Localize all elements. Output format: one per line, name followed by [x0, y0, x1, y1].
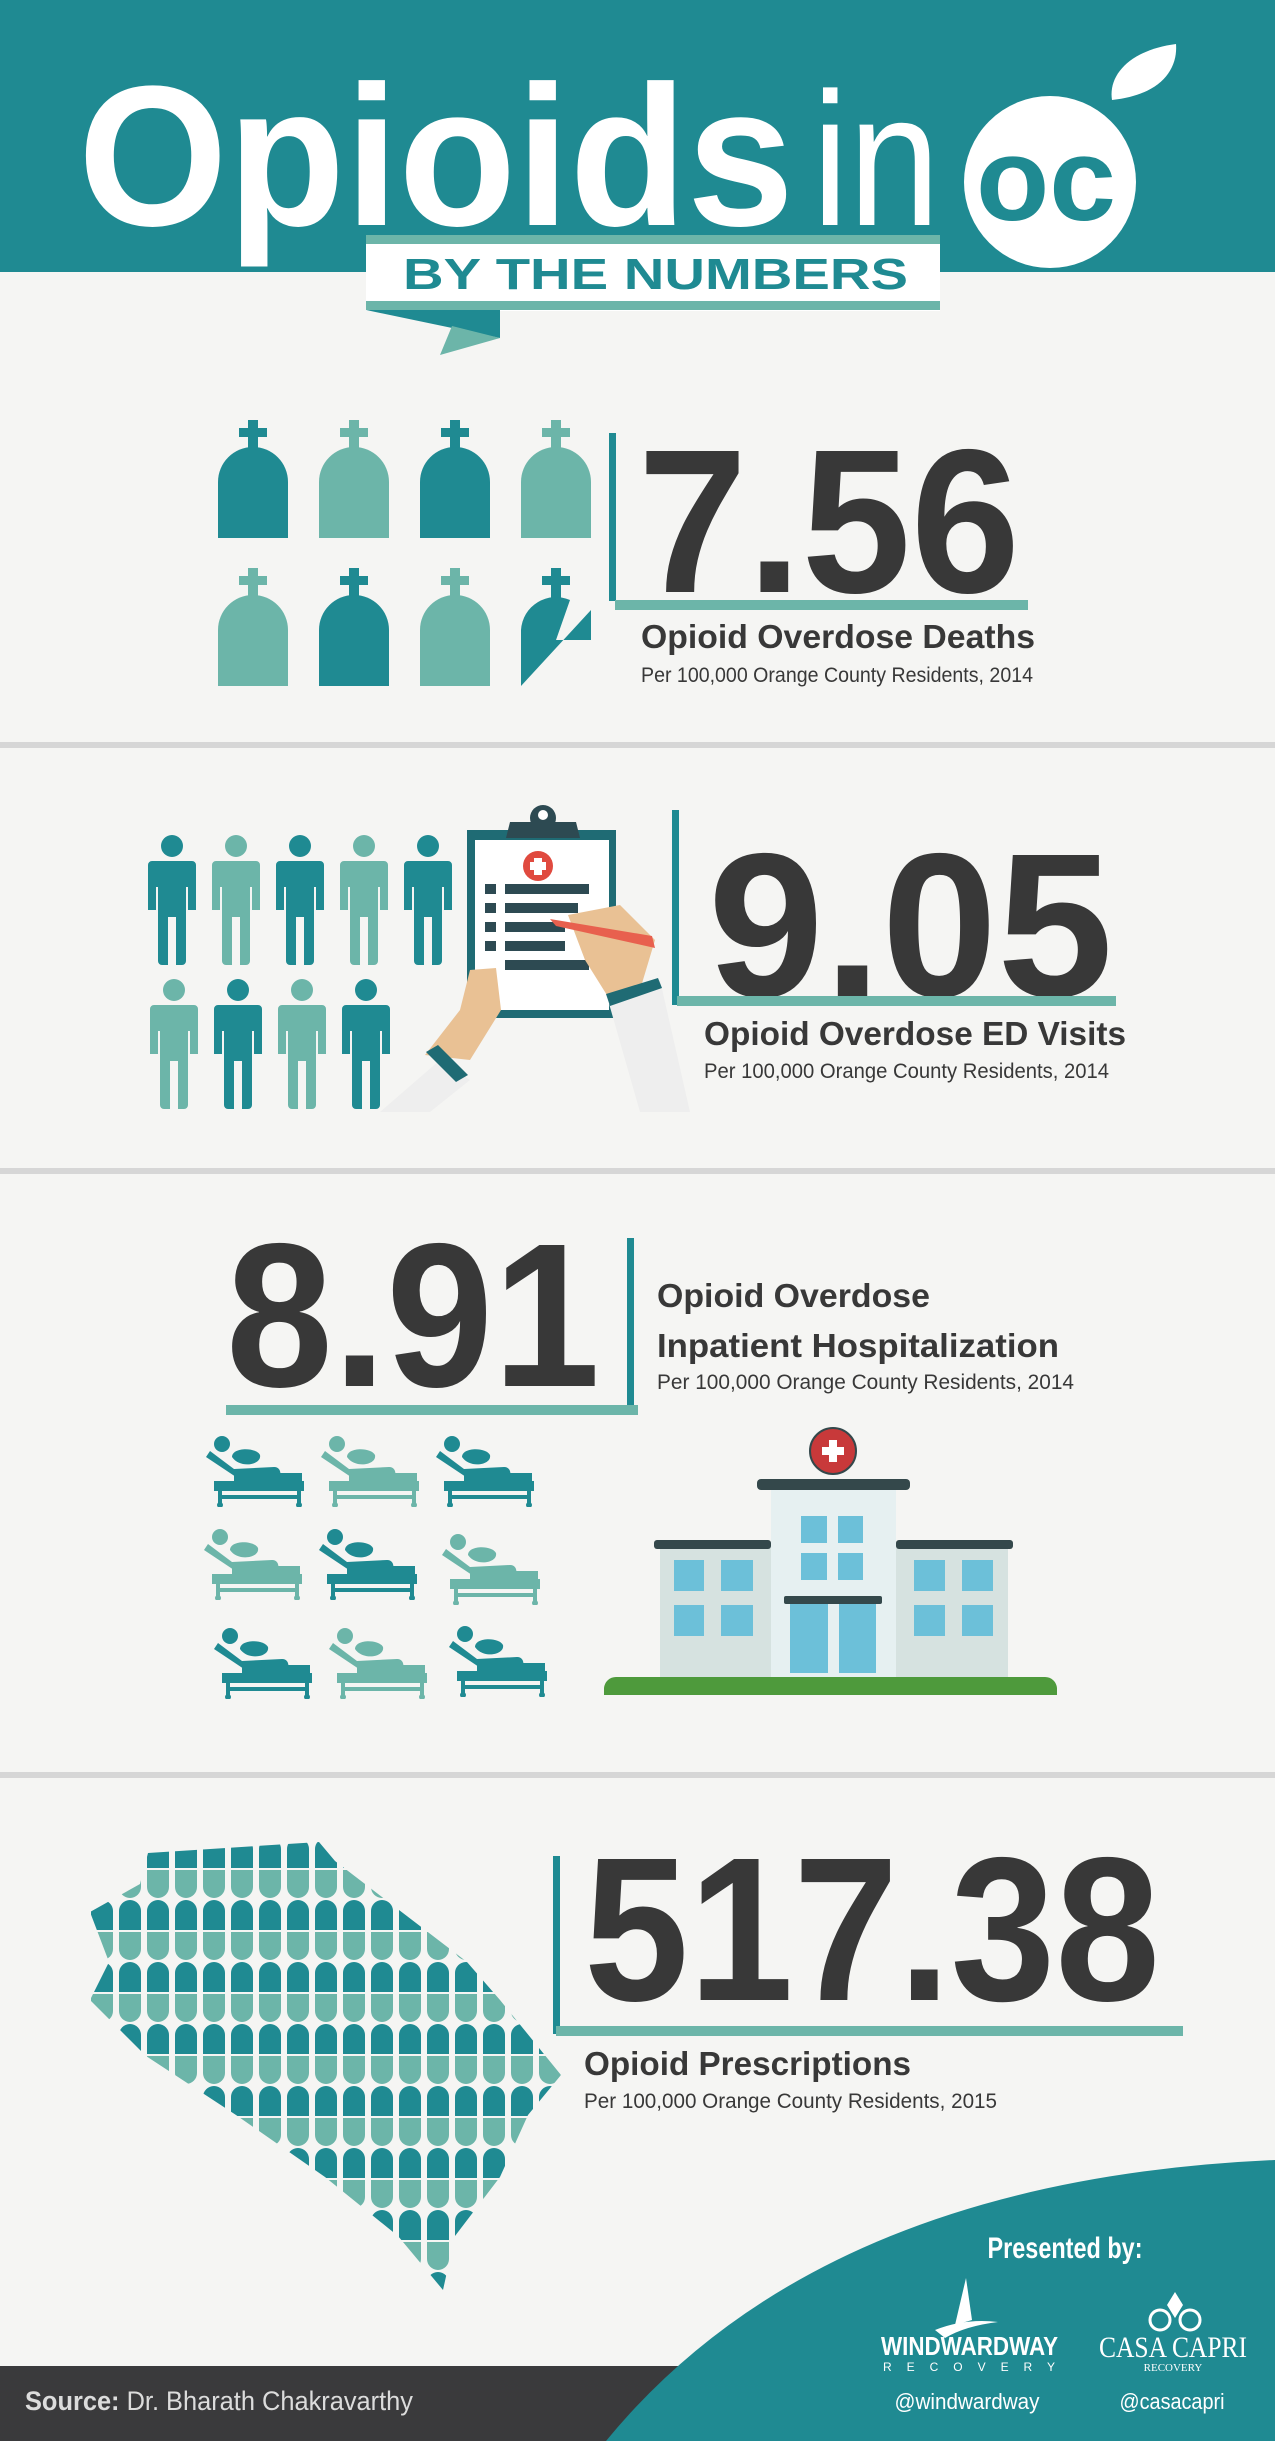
footer source bar: [0, 2366, 700, 2441]
stat: 8.91: Opioid Overdose: [657, 1277, 930, 1314]
logo: windwardway: RECOVERY: [883, 2360, 1055, 2374]
stat: 517.38: Per 100,000 Orange County Residents, 2015: [584, 2090, 997, 2113]
background header band: [0, 0, 1275, 272]
logo circle: OC: oc: [976, 114, 1116, 246]
title: in: [812, 54, 940, 266]
icon: clipboard with hands: [380, 805, 690, 1112]
logo: casa capri: CASA CAPRI: [1099, 2331, 1247, 2364]
footer presented by panel: [606, 2160, 1275, 2441]
logo circle: OC: [964, 44, 1176, 268]
logo: casa capri: [1099, 2292, 1247, 2414]
icon: people: [148, 835, 452, 1109]
stat: 7.56: Opioid Overdose Deaths: [641, 618, 1035, 655]
icon: tombstones: [218, 420, 591, 686]
stat: 517.38: 517.38: [584, 1815, 1160, 2044]
stat: 9.05: Per 100,000 Orange County Residents, 2014: [704, 1060, 1109, 1083]
section 1: deaths: [218, 407, 1035, 687]
stat: 8.91: Per 100,000 Orange County Residents, 2014: [657, 1371, 1074, 1394]
stat: 517.38: Opioid Prescriptions: [584, 2045, 911, 2082]
section 3: hospitalization: [204, 1201, 1074, 1700]
logo: windwardway: @windwardway: [894, 2389, 1040, 2414]
logo: windwardway: WINDWARDWAY: [881, 2331, 1058, 2361]
title: Opioids: [78, 45, 794, 268]
stat: 8.91: Inpatient Hospitalization: [657, 1327, 1059, 1364]
stat: 7.56: Per 100,000 Orange County Residents, 2014: [641, 664, 1033, 687]
stat: 9.05: 9.05: [708, 811, 1113, 1040]
stat: 8.91: [226, 1201, 1074, 1430]
section 4: prescriptions: [80, 1815, 1183, 2300]
footer source bar: Source: Dr. Bharath Chakravarthy: [25, 2386, 413, 2416]
ribbon: by the numbers: BY THE NUMBERS: [403, 250, 908, 299]
icon: beds: [204, 1436, 547, 1700]
logo: casa capri: @casacapri: [1120, 2389, 1224, 2414]
stat: 8.91: 8.91: [226, 1201, 600, 1430]
icon: hospital: [604, 1428, 1057, 1695]
stat: 9.05: Opioid Overdose ED Visits: [704, 1015, 1126, 1052]
logo: windwardway: [881, 2278, 1058, 2414]
map of pills: [91, 1842, 561, 2290]
footer presented by panel: Presented by:: [988, 2232, 1142, 2265]
section 2: ED visits: [148, 805, 1126, 1112]
ribbon: by the numbers: [366, 235, 940, 355]
stat: 7.56: 7.56: [638, 407, 1020, 636]
logo: casa capri: RECOVERY: [1144, 2362, 1202, 2374]
